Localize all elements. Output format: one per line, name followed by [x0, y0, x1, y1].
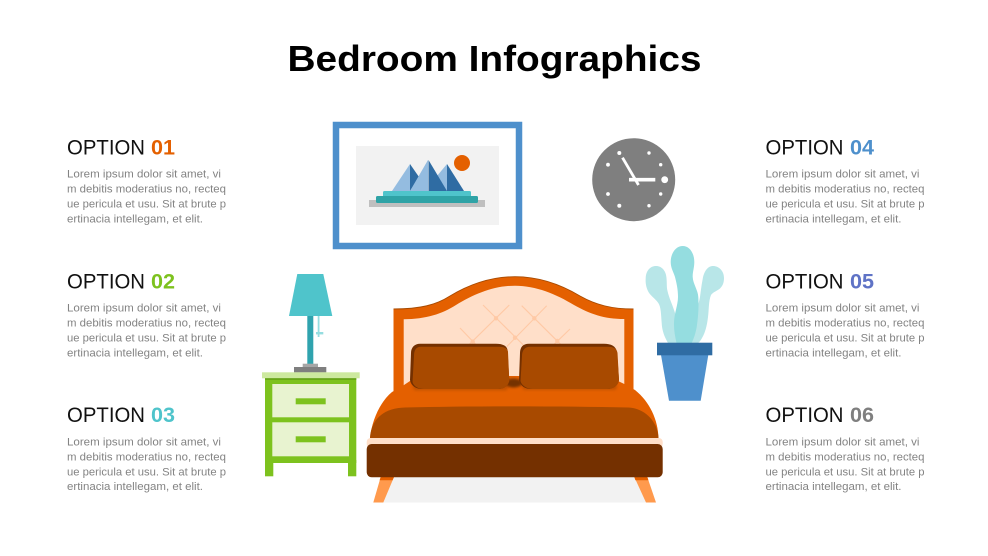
- icon: wall clock: [592, 138, 675, 221]
- text block: option 03: [67, 436, 226, 493]
- bed base: [367, 444, 663, 477]
- text block: option 04: ertinacia intellegam, et elit.: [766, 214, 902, 226]
- heading: option 01: OPTION: [67, 136, 145, 160]
- text block: option 02: [67, 302, 226, 360]
- text block: option 03: m debitis moderatius no, recteq: [67, 451, 226, 463]
- text block: option 01: Lorem ipsum dolor sit amet, vi: [67, 168, 221, 180]
- text block: option 05: ue pericula et usu. Sit at brute p: [766, 332, 924, 344]
- plant leaves: [646, 246, 724, 343]
- text block: option 01: m debitis moderatius no, recteq: [67, 184, 226, 196]
- panel: option 02: [67, 270, 226, 360]
- text block: option 02: Lorem ipsum dolor sit amet, vi: [67, 302, 221, 314]
- heading: option 03: OPTION: [67, 403, 145, 427]
- icon: nightstand: [262, 372, 360, 476]
- panel: option 05: [766, 270, 924, 360]
- blanket: [370, 406, 658, 438]
- heading: option 04: 04: [850, 136, 874, 160]
- text block: option 05: [766, 302, 924, 360]
- heading: option 01: 01: [151, 136, 175, 160]
- text block: option 02: m debitis moderatius no, recteq: [67, 318, 226, 330]
- text block: option 04: Lorem ipsum dolor sit amet, vi: [766, 168, 920, 180]
- text block: option 01: [67, 168, 226, 226]
- cream strip: [367, 438, 663, 448]
- drawer: bottom: [272, 422, 349, 456]
- heading: option 03: 03: [151, 403, 175, 427]
- heading: option 05: 05: [850, 270, 874, 294]
- headboard tufting: [460, 305, 570, 347]
- text block: option 02: ue pericula et usu. Sit at brute p: [67, 332, 226, 344]
- text block: option 01: ertinacia intellegam, et elit.: [67, 214, 203, 226]
- soft shadow under pillows: [413, 384, 617, 390]
- text block: option 04: m debitis moderatius no, recteq: [766, 184, 924, 196]
- drawer: top: [272, 384, 349, 417]
- text block: option 04: [766, 168, 924, 226]
- heading: option 05: OPTION: [766, 270, 844, 294]
- panel: option 01: [67, 136, 226, 226]
- text block: option 06: m debitis moderatius no, recteq: [766, 451, 924, 463]
- pillow shadow: [504, 378, 522, 388]
- heading: option 02: 02: [151, 270, 175, 294]
- text block: option 04: ue pericula et usu. Sit at brute p: [766, 198, 924, 210]
- icon: potted plant: [646, 246, 724, 401]
- panel: option 04: [766, 136, 924, 226]
- text block: option 03: ertinacia intellegam, et elit.: [67, 481, 203, 493]
- icon: framed mountain picture: [336, 125, 519, 246]
- title: Bedroom Infographics: [288, 38, 702, 79]
- text block: option 05: Lorem ipsum dolor sit amet, vi: [766, 302, 920, 314]
- heading: option 04: OPTION: [766, 136, 844, 160]
- text block: option 06: [766, 436, 924, 493]
- pillow: right: [519, 344, 619, 389]
- text block: option 05: ertinacia intellegam, et elit.: [766, 348, 902, 360]
- heading: option 02: OPTION: [67, 270, 145, 294]
- text block: option 06: ue pericula et usu. Sit at brute p: [766, 466, 924, 478]
- heading: option 06: 06: [850, 403, 874, 427]
- icon: table lamp: [289, 274, 332, 372]
- floor shadow: [383, 477, 647, 502]
- text block: option 06: ertinacia intellegam, et elit.: [766, 481, 902, 493]
- text block: option 03: ue pericula et usu. Sit at brute p: [67, 466, 226, 478]
- pillow: left: [410, 344, 509, 389]
- panel: option 03: [67, 403, 226, 493]
- plant pot: [657, 343, 712, 401]
- text block: option 03: Lorem ipsum dolor sit amet, vi: [67, 436, 221, 448]
- heading: option 06: OPTION: [766, 403, 844, 427]
- panel: option 06: [766, 403, 924, 493]
- icon: bed: [367, 277, 663, 502]
- text block: option 01: ue pericula et usu. Sit at brute p: [67, 198, 226, 210]
- text block: option 02: ertinacia intellegam, et elit.: [67, 348, 203, 360]
- mattress: [370, 376, 658, 438]
- bed legs: [373, 477, 656, 502]
- text block: option 05: m debitis moderatius no, recteq: [766, 318, 924, 330]
- text block: option 06: Lorem ipsum dolor sit amet, vi: [766, 436, 920, 448]
- headboard: [394, 277, 634, 395]
